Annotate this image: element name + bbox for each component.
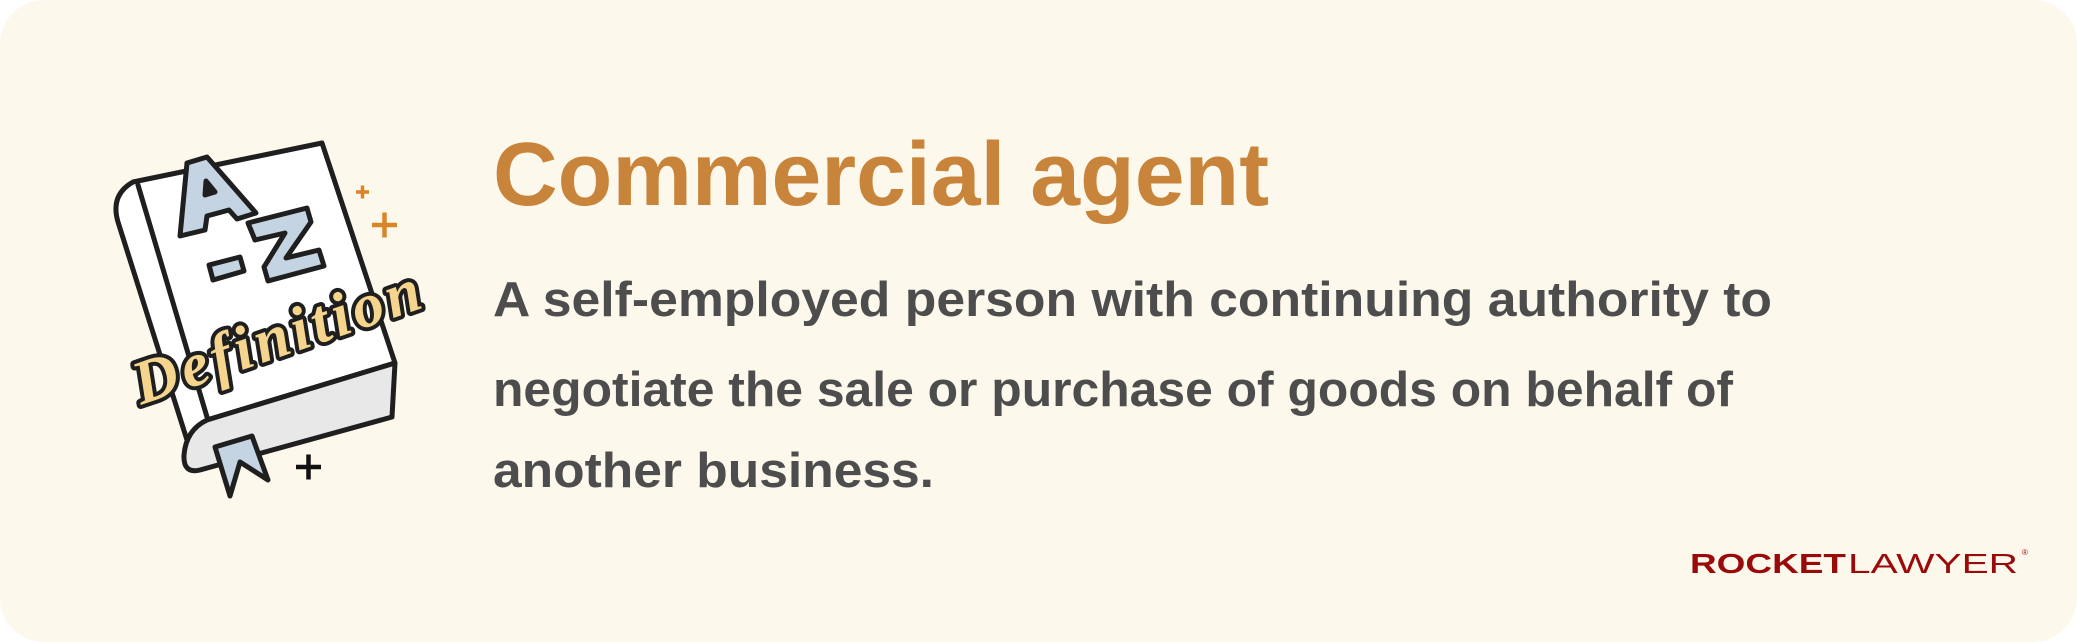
- body text: negotiate the sale or purchase of goods on behalf of: [493, 363, 1734, 417]
- body text: A self-employed person with continuing authority to: [493, 273, 1772, 327]
- body text: [493, 273, 1772, 498]
- bookmark: [215, 436, 268, 496]
- icon: sparkles: [296, 186, 397, 480]
- body text: another business.: [493, 444, 934, 498]
- title: Commercial agent: [493, 125, 1269, 225]
- spine line: [138, 185, 207, 417]
- page block: [184, 363, 395, 471]
- logo: Rocket Lawyer: LAWYER: [1848, 548, 2018, 579]
- logo: Rocket Lawyer: ®: [2022, 548, 2028, 557]
- dash: [209, 257, 244, 280]
- letter Z: [248, 208, 324, 281]
- letter A: [180, 157, 256, 236]
- book cover: [116, 143, 395, 440]
- logo: Rocket Lawyer: [1690, 548, 2028, 579]
- logo: Rocket Lawyer: ROCKET: [1690, 548, 1846, 579]
- text: Definition script: Definition: [123, 256, 429, 418]
- icon: definition book: [116, 143, 395, 496]
